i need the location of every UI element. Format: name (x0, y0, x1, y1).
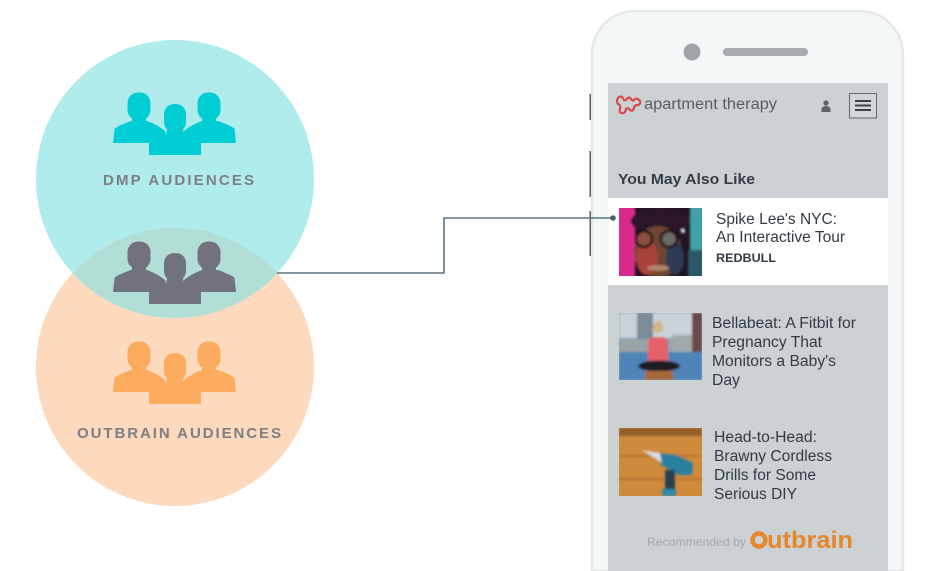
phone screen (608, 83, 888, 571)
article 2 title (712, 315, 856, 389)
phone speaker (723, 48, 808, 56)
article 3 title: Drills for Some (714, 467, 816, 484)
article 2 title: Day (712, 372, 740, 389)
article 1 title: Spike Lee's NYC: (716, 211, 837, 228)
logo O (752, 534, 766, 546)
label: Outbrain audiences: OUTBRAIN AUDIENCES (77, 425, 281, 442)
side button 2 (590, 151, 591, 197)
circle: DMP audiences (36, 40, 314, 318)
phone camera (684, 44, 700, 60)
side button 3 (590, 211, 591, 256)
article 2 title: Bellabeat: A Fitbit for (712, 315, 856, 332)
logo: apartment therapy (617, 96, 777, 113)
article 1 source: REDBULL (716, 253, 776, 265)
article 1 title: An Interactive Tour (716, 229, 845, 246)
icon: Outbrain people (113, 342, 236, 404)
heading: You May Also Like: You May Also Like (618, 171, 755, 188)
label: DMP audiences: DMP AUDIENCES (103, 172, 254, 189)
circle overlap (72, 228, 277, 318)
article 2 title: Pregnancy That (712, 334, 823, 351)
icon: hamburger menu (850, 94, 876, 118)
logo: Outbrain (752, 527, 853, 554)
side button 1 (590, 94, 591, 120)
phone (590, 11, 903, 571)
logo text: apartment therapy (644, 96, 777, 113)
recommended by label: Recommended by (647, 535, 746, 549)
icon: DMP people (113, 92, 236, 155)
article 2 title: Monitors a Baby's (712, 353, 836, 370)
highlighted article row (608, 198, 888, 285)
article 3 title (714, 429, 832, 503)
icon: overlap people (113, 242, 236, 304)
logo mark (617, 96, 640, 113)
circle: Outbrain audiences (36, 228, 314, 506)
photo: yoga (619, 313, 702, 380)
article 3 title: Brawny Cordless (714, 448, 832, 465)
article 1 title (716, 211, 845, 246)
logo wordmark: utbrain (767, 527, 853, 554)
icon: user (822, 100, 830, 112)
article 3 title: Serious DIY (714, 486, 797, 503)
phone body (592, 11, 903, 571)
photo: Spike Lee (619, 208, 702, 276)
connector line (277, 215, 616, 273)
photo: drill (619, 428, 702, 496)
article 3 title: Head-to-Head: (714, 429, 817, 446)
